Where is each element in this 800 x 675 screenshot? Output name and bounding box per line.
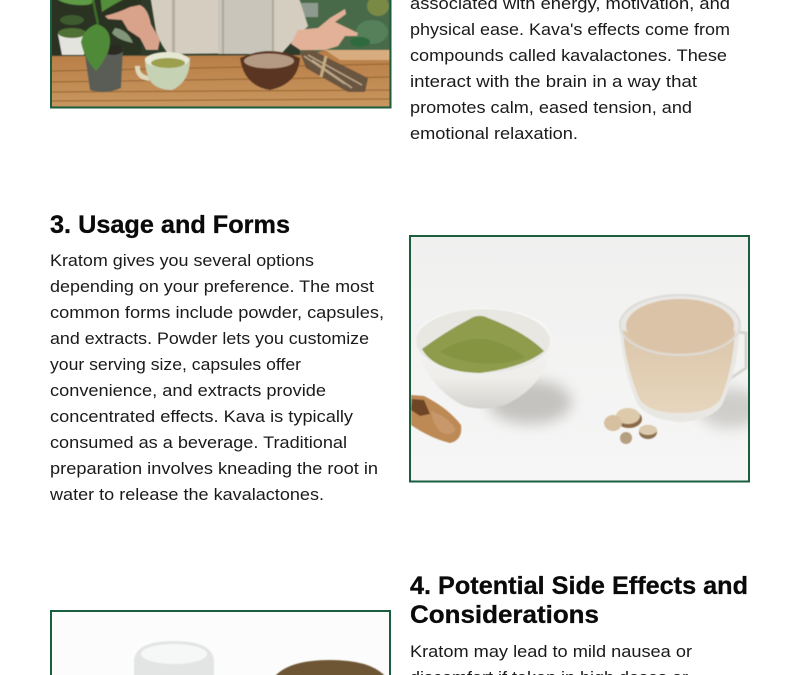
glass mug	[619, 295, 740, 422]
text block: kava effects: interact with the brain in a way that	[410, 72, 697, 91]
table	[51, 50, 390, 107]
text block: usage and forms: common forms include powder, capsules,	[50, 303, 384, 322]
text block: kava effects: compounds called kavalactones. These	[410, 46, 727, 65]
text block: kava effects: emotional relaxation.	[410, 124, 578, 143]
background foliage	[51, 0, 390, 107]
text block: usage and forms: depending on your preference. The most	[50, 277, 374, 296]
text block: usage and forms: and extracts. Powder lets you customize	[50, 329, 369, 348]
image: kratom powder bowl and cup of kava	[410, 236, 762, 482]
small white pot	[58, 32, 86, 55]
text block: usage and forms: water to release the kavalactones.	[49, 485, 324, 504]
text block: side effects: Kratom may lead to mild nausea or	[410, 642, 692, 661]
text block: kava effects: physical ease. Kava's effects come from	[410, 20, 730, 39]
text block: usage and forms: consumed as a beverage. Traditional	[50, 433, 347, 452]
cup	[135, 66, 150, 81]
image: glass of water and brown bowl	[51, 611, 390, 675]
leaves	[81, 24, 110, 71]
heading: usage and forms: 3. Usage and Forms	[50, 211, 290, 239]
right hand and forearm	[291, 9, 358, 50]
heading: potential side effects	[410, 572, 748, 629]
root bundle	[300, 50, 368, 92]
grey pot	[85, 48, 123, 92]
text block: usage and forms	[49, 251, 384, 504]
image frame	[51, 0, 390, 108]
image: person with kratom plant, tea and kava bowl on a table	[51, 0, 390, 108]
heading: potential side effects: 4. Potential Side Effects and	[410, 572, 748, 600]
left hand and forearm	[105, 5, 160, 50]
text block: kava effects	[410, 0, 730, 143]
text block: usage and forms: Kratom gives you several options	[50, 251, 314, 270]
glass mug handle	[728, 332, 746, 380]
shadows	[488, 380, 572, 424]
image frame	[51, 611, 390, 675]
glass	[134, 641, 214, 675]
text block: usage and forms: concentrated effects. Kava is typically	[50, 407, 354, 426]
coconut bowl	[240, 51, 300, 90]
image frame	[410, 236, 749, 482]
wooden scoop	[411, 395, 461, 443]
plant leaves behind	[60, 15, 84, 25]
text block: usage and forms: convenience, and extracts provide	[50, 381, 326, 400]
text block: side effects	[410, 642, 692, 675]
text block: usage and forms: your serving size, capsules offer	[50, 355, 301, 374]
brown bowl	[272, 660, 388, 675]
text block: kava effects: promotes calm, eased tension, and	[410, 98, 692, 117]
heading: potential side effects: Considerations	[410, 601, 599, 629]
root slices	[620, 414, 643, 429]
text block: usage and forms: preparation involves kneading the root in	[50, 459, 378, 478]
shirt	[150, 0, 308, 54]
white bowl	[432, 366, 538, 409]
green powder	[422, 316, 544, 373]
